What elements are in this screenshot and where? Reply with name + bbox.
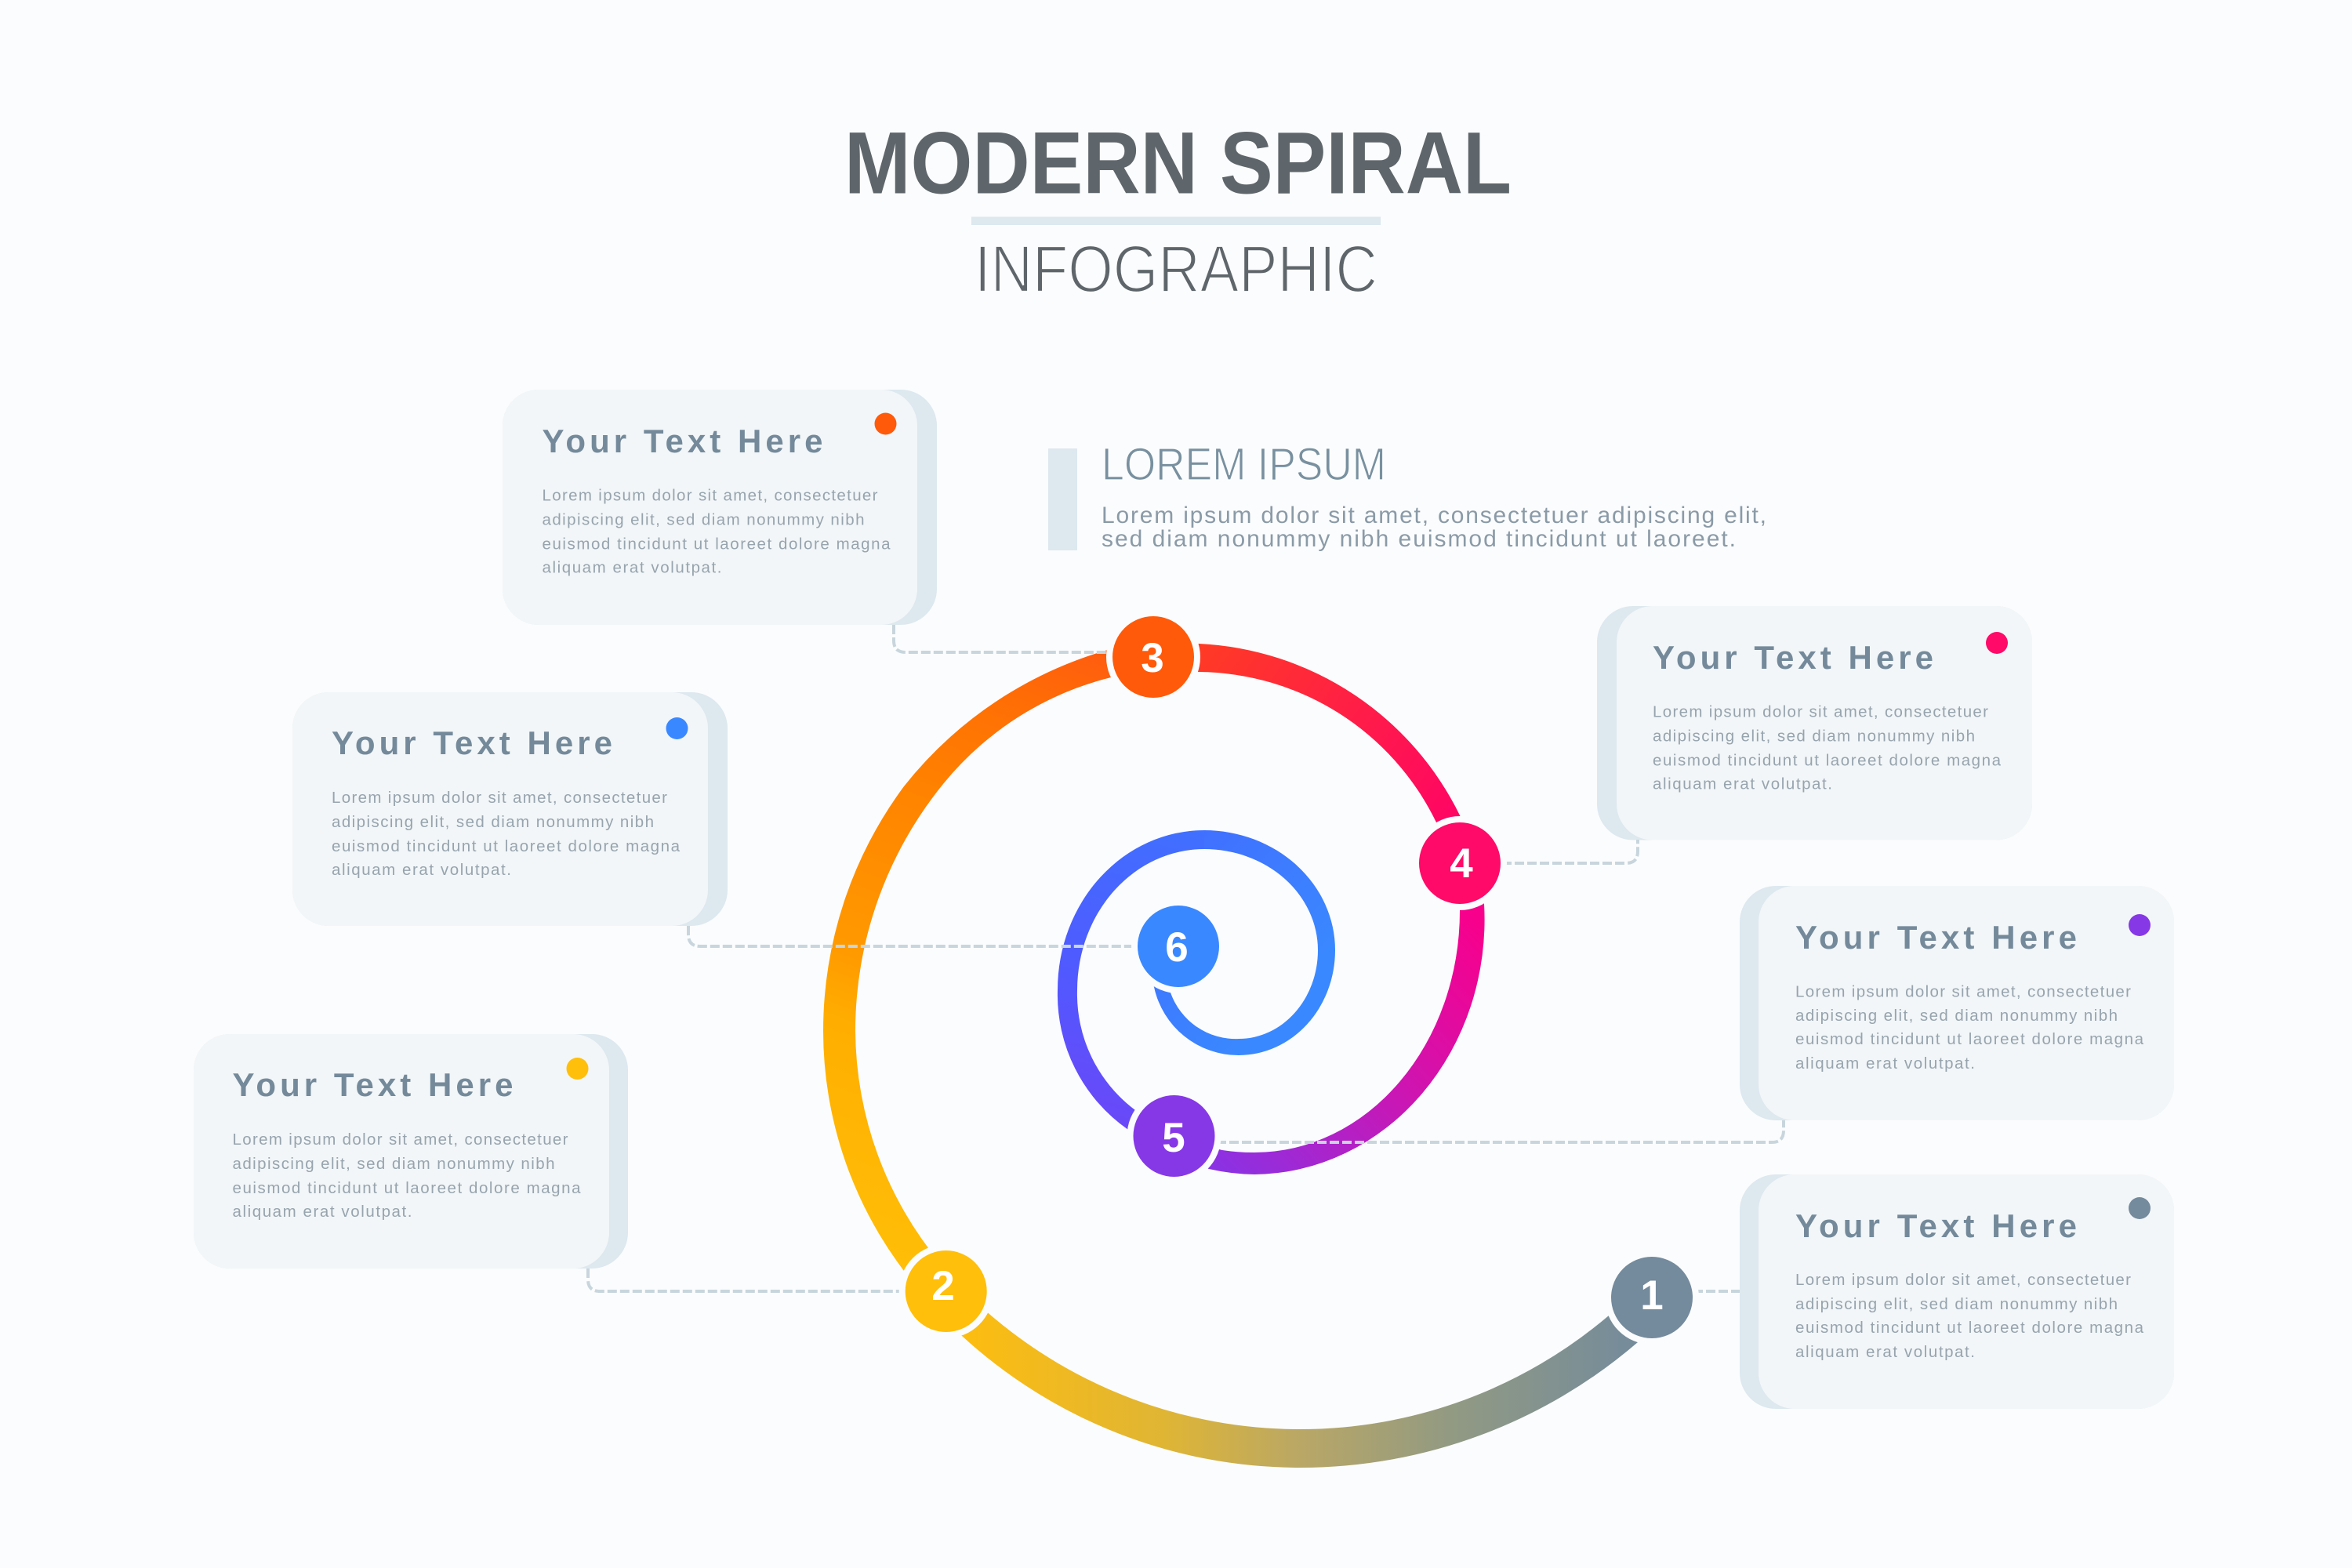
card 1 body: Lorem ipsum dolor sit amet, consectetuer — [1795, 1271, 2131, 1289]
card 5 dot — [2129, 914, 2151, 936]
spiral segment 2 to 3 — [823, 644, 1129, 1292]
card 4 heading: Your Text Here — [1653, 639, 1933, 676]
card 2 body — [232, 1131, 581, 1221]
marker 4 — [1413, 816, 1507, 910]
card 6 body: euismod tincidunt ut laoreet dolore magna — [332, 837, 681, 855]
card 2 body: euismod tincidunt ut laoreet dolore magna — [232, 1179, 581, 1197]
marker 1 — [1605, 1250, 1699, 1345]
marker 1: 1 — [1640, 1272, 1664, 1319]
card 3 body: adipiscing elit, sed diam nonummy nibh — [543, 511, 864, 528]
intro block — [1048, 439, 1766, 552]
marker 5 — [1127, 1089, 1221, 1183]
marker 2: 2 — [931, 1263, 955, 1309]
spiral band — [823, 643, 1654, 1468]
intro paragraph — [1102, 503, 1766, 552]
card 6 body — [332, 789, 681, 879]
card 6 body: Lorem ipsum dolor sit amet, consectetuer — [332, 789, 667, 807]
spiral segment 4 to 5 — [1188, 882, 1485, 1174]
marker 2 — [899, 1244, 993, 1338]
card 6 body: aliquam erat volutpat. — [332, 861, 511, 879]
panel: card 6 — [292, 692, 728, 926]
intro paragraph: sed diam nonummy nibh euismod tincidunt ut laoreet. — [1102, 526, 1736, 552]
card 6 heading: Your Text Here — [332, 724, 612, 761]
card 5 body: euismod tincidunt ut laoreet dolore magna — [1795, 1030, 2144, 1048]
card 2 body: Lorem ipsum dolor sit amet, consectetuer — [232, 1131, 568, 1149]
card 1 heading: Your Text Here — [1795, 1207, 2077, 1244]
spiral segment 1 to 2 — [945, 1301, 1654, 1468]
card 3 body: aliquam erat volutpat. — [543, 558, 721, 577]
marker 5: 5 — [1162, 1115, 1185, 1161]
intro paragraph: Lorem ipsum dolor sit amet, consectetuer adipiscing elit, — [1102, 503, 1766, 528]
card 2 body: aliquam erat volutpat. — [232, 1203, 412, 1221]
intro heading: LOREM IPSUM — [1102, 439, 1386, 490]
card 3 body: Lorem ipsum dolor sit amet, consectetuer — [543, 486, 878, 505]
card 4 dot — [1986, 632, 2008, 654]
panel: card 3 — [503, 390, 937, 625]
card 1 body: aliquam erat volutpat. — [1795, 1343, 1975, 1361]
card 6 body: adipiscing elit, sed diam nonummy nibh — [332, 813, 654, 831]
card 4 body: aliquam erat volutpat. — [1653, 775, 1832, 793]
card 5 body: aliquam erat volutpat. — [1795, 1054, 1975, 1073]
card 4 body: euismod tincidunt ut laoreet dolore magna — [1653, 751, 2002, 770]
title underline — [971, 216, 1381, 225]
card 2 body: adipiscing elit, sed diam nonummy nibh — [232, 1155, 555, 1173]
intro accent bar — [1048, 448, 1077, 550]
spiral segment 3 to 4 — [1176, 643, 1470, 843]
card 4 body: adipiscing elit, sed diam nonummy nibh — [1653, 728, 1975, 745]
card 5 body: adipiscing elit, sed diam nonummy nibh — [1795, 1007, 2118, 1025]
spiral segment 5 to top — [1058, 830, 1206, 1141]
title: MODERN SPIRAL — [844, 114, 1512, 212]
card 2 heading: Your Text Here — [232, 1066, 513, 1103]
card 5 body: Lorem ipsum dolor sit amet, consectetuer — [1795, 983, 2131, 1000]
panel: card 5 — [1740, 886, 2174, 1120]
card 6 dot — [666, 717, 688, 739]
connector lines — [588, 625, 1784, 1291]
panel: card 4 — [1597, 606, 2032, 840]
subtitle: INFOGRAPHIC — [975, 232, 1377, 306]
marker 3 — [1106, 610, 1200, 704]
marker 6: 6 — [1165, 924, 1189, 971]
card 4 body: Lorem ipsum dolor sit amet, consectetuer — [1653, 702, 1988, 721]
card 3 body — [543, 486, 891, 577]
panel: card 1 — [1740, 1174, 2174, 1409]
marker 6 — [1131, 899, 1225, 993]
card 5 body — [1795, 983, 2144, 1073]
card 3 heading: Your Text Here — [543, 423, 823, 459]
marker 4: 4 — [1450, 840, 1473, 887]
card 1 body: adipiscing elit, sed diam nonummy nibh — [1795, 1295, 2118, 1313]
card 1 body: euismod tincidunt ut laoreet dolore magna — [1795, 1319, 2144, 1337]
card 1 body — [1795, 1271, 2144, 1361]
marker 3: 3 — [1141, 635, 1164, 681]
card 5 heading: Your Text Here — [1795, 919, 2077, 956]
card 2 dot — [566, 1058, 588, 1080]
spiral segment top to 6 — [1149, 830, 1335, 1055]
card 3 body: euismod tincidunt ut laoreet dolore magna — [543, 535, 891, 554]
card 4 body — [1653, 702, 2002, 793]
panel: card 2 — [194, 1034, 628, 1269]
card 1 dot — [2129, 1197, 2151, 1219]
card 3 dot — [875, 412, 897, 434]
